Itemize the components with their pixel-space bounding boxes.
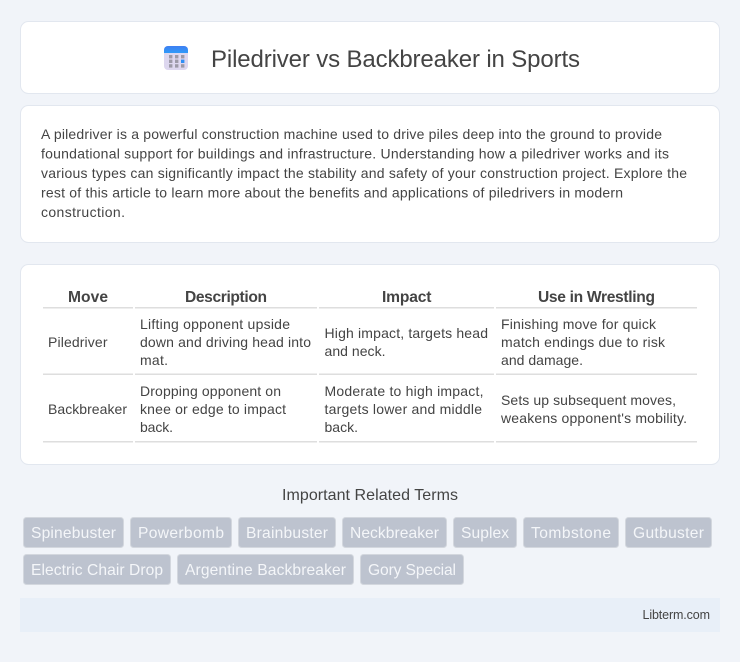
text block: intro: A piledriver is a powerful construction machine used to drive piles deep into the ground to provide [41, 126, 662, 142]
table row: Piledriver: down and driving head into [140, 334, 311, 350]
text block: intro: various types can significantly impact the stability and safety of your construction project. Explore the [41, 165, 687, 181]
table row: Backbreaker: back. [324, 419, 358, 435]
tags: related terms: Gutbuster [633, 525, 704, 542]
table row: Backbreaker: weakens opponent's mobility. [500, 410, 687, 426]
table row: Backbreaker [48, 383, 687, 435]
text block: intro: construction. [41, 204, 125, 220]
tags: related terms: Neckbreaker [350, 525, 439, 542]
tags: related terms: Suplex [461, 525, 509, 542]
tags: related terms: Powerbomb [138, 525, 224, 542]
tags: related terms [24, 518, 712, 584]
panel: title header [20, 22, 720, 94]
table header: Description [185, 289, 267, 306]
icon: calendar [164, 46, 188, 70]
tags: related terms: Electric Chair Drop [31, 562, 163, 579]
table row: Piledriver [48, 316, 666, 368]
heading: related terms: Important Related Terms [282, 487, 458, 504]
tags: related terms: Spinebuster [31, 525, 116, 542]
footer credit: Libterm.com [642, 608, 710, 622]
table header: Move [68, 289, 108, 306]
table row: Piledriver: match endings due to risk [501, 334, 666, 350]
panel: intro paragraph [20, 106, 720, 242]
table row: Backbreaker: Sets up subsequent moves, [501, 392, 676, 408]
table header: Impact [382, 289, 432, 306]
table row: Backbreaker: knee or edge to impact [140, 401, 286, 417]
table header [68, 289, 655, 306]
table row: Piledriver: Finishing move for quick [501, 316, 657, 332]
table row: Piledriver: and neck. [324, 343, 386, 359]
tags: related terms: Gory Special [368, 562, 456, 579]
table row: Piledriver: and damage. [501, 352, 583, 368]
table row: Backbreaker: Dropping opponent on [140, 383, 281, 399]
tags: related terms: Brainbuster [246, 525, 328, 542]
table row: Piledriver: High impact, targets head [324, 325, 488, 341]
title: Piledriver vs Backbreaker in Sports [211, 46, 580, 73]
table row: Backbreaker: back. [140, 419, 173, 435]
text block: intro [41, 126, 687, 220]
table row: Piledriver: Piledriver [48, 334, 108, 350]
tags: related terms: Tombstone [531, 525, 611, 542]
table row: Piledriver: mat. [140, 352, 168, 368]
table row: Backbreaker: Moderate to high impact, [324, 383, 484, 399]
footer [20, 598, 720, 632]
table row: Backbreaker: Backbreaker [48, 401, 127, 417]
tags: related terms: Argentine Backbreaker [185, 562, 346, 579]
table row: Piledriver: Lifting opponent upside [140, 316, 290, 332]
table header: Use in Wrestling [538, 289, 655, 306]
text block: intro: foundational support for buildings and infrastructure. Understanding how a piledriver works and its [41, 146, 669, 162]
panel: comparison table [20, 264, 720, 464]
table row: Backbreaker: targets lower and middle [324, 401, 482, 417]
text block: intro: rest of this article to learn more about the benefits and applications of piledrivers in modern [41, 184, 623, 200]
